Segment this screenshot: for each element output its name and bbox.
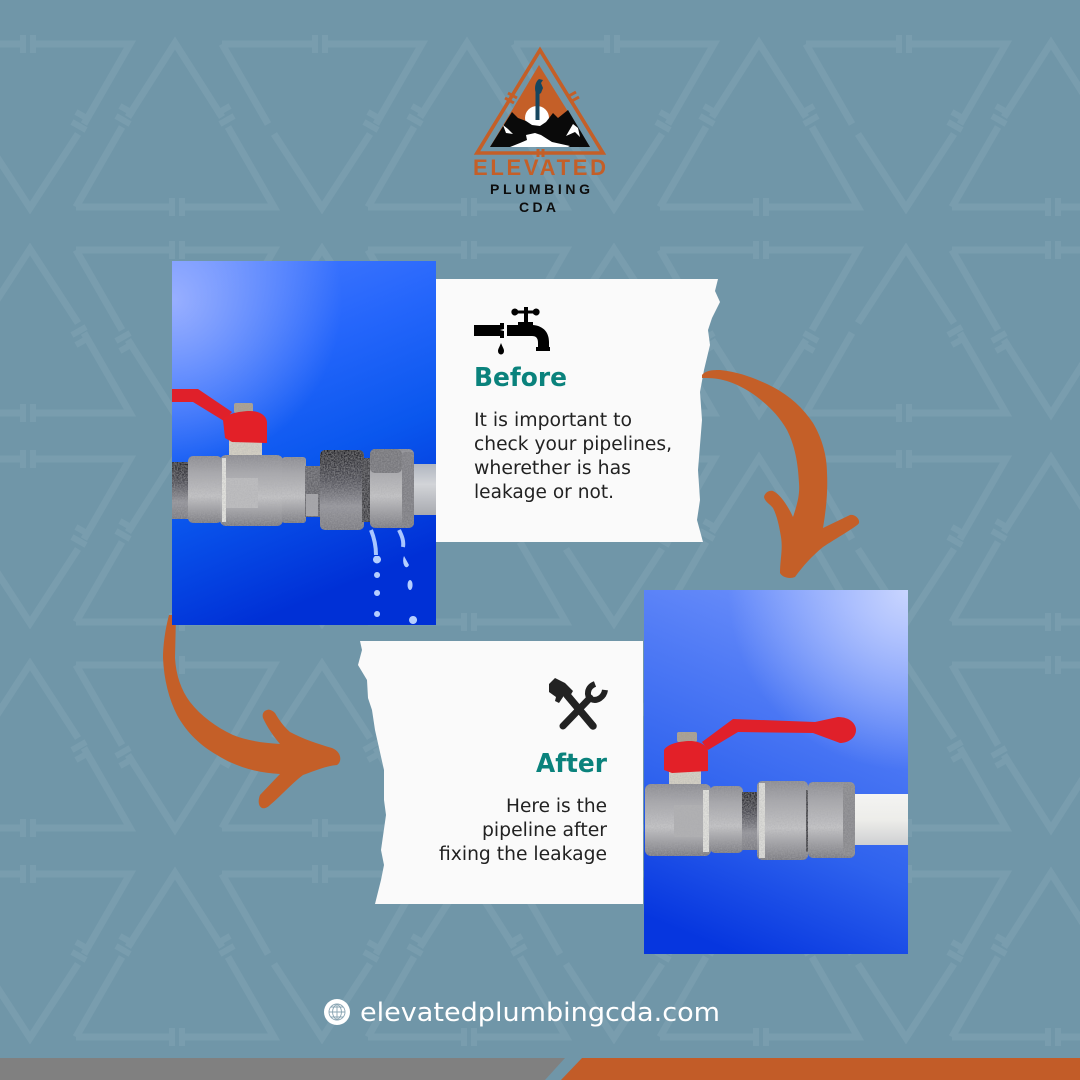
logo sun (525, 106, 549, 130)
logo inner triangle (490, 65, 590, 147)
icon: crossed wrenches (549, 678, 605, 726)
white pipe (854, 794, 908, 845)
heading: Before: Before (474, 363, 567, 393)
logo triangle outline (477, 50, 603, 153)
pipe wrench (567, 695, 593, 726)
icon: broken leaking tap (474, 307, 550, 355)
red cap (223, 411, 267, 443)
arrow: before to after (702, 370, 859, 578)
text block: after description: pipeline after (482, 820, 607, 841)
tap handle (511, 307, 540, 323)
text block: before description: It is important to (474, 410, 632, 431)
text block: before description: check your pipelines, (474, 434, 672, 455)
footer bar: grey (0, 1058, 565, 1080)
valve body (645, 732, 855, 860)
text block: after description: Here is the (506, 796, 607, 817)
tap spout (507, 322, 550, 351)
photo: repaired valve after (644, 590, 908, 954)
spanner (563, 698, 590, 726)
red cap (664, 741, 708, 773)
logo snow and river (503, 124, 580, 147)
website url: elevatedplumbingcda.com (360, 998, 720, 1028)
grey pipe (412, 464, 436, 515)
tap water drop (498, 343, 504, 355)
water drops (373, 556, 417, 624)
logo: Elevated Plumbing CDA (473, 50, 606, 215)
icon: globe (324, 999, 350, 1025)
logo word ELEVATED: ELEVATED (473, 155, 606, 180)
red handle (702, 717, 856, 750)
footer bar: orange (561, 1058, 1080, 1080)
panel: before note paper (436, 279, 720, 542)
panel: after note paper (358, 641, 643, 904)
photo: leaking valve before (172, 261, 436, 625)
logo wrench (535, 79, 543, 120)
tap broken pipe (474, 323, 504, 338)
heading: After: After (536, 749, 607, 779)
text block: before description: wherether is has (474, 458, 631, 479)
logo mountains (490, 110, 590, 147)
arrow: after to fixed (163, 615, 340, 808)
water drips (371, 530, 403, 555)
logo word CDA: CDA (519, 199, 556, 215)
logo word PLUMBING: PLUMBING (490, 181, 590, 197)
valve body (172, 403, 414, 530)
photo background (644, 590, 908, 954)
text block: after description (439, 796, 607, 865)
text block: after description: fixing the leakage (439, 844, 607, 865)
text block: before description: leakage or not. (474, 482, 614, 503)
photo background (172, 261, 436, 625)
logo pipe joints (505, 92, 579, 157)
text block: before description (474, 410, 672, 503)
red handle (172, 389, 232, 421)
